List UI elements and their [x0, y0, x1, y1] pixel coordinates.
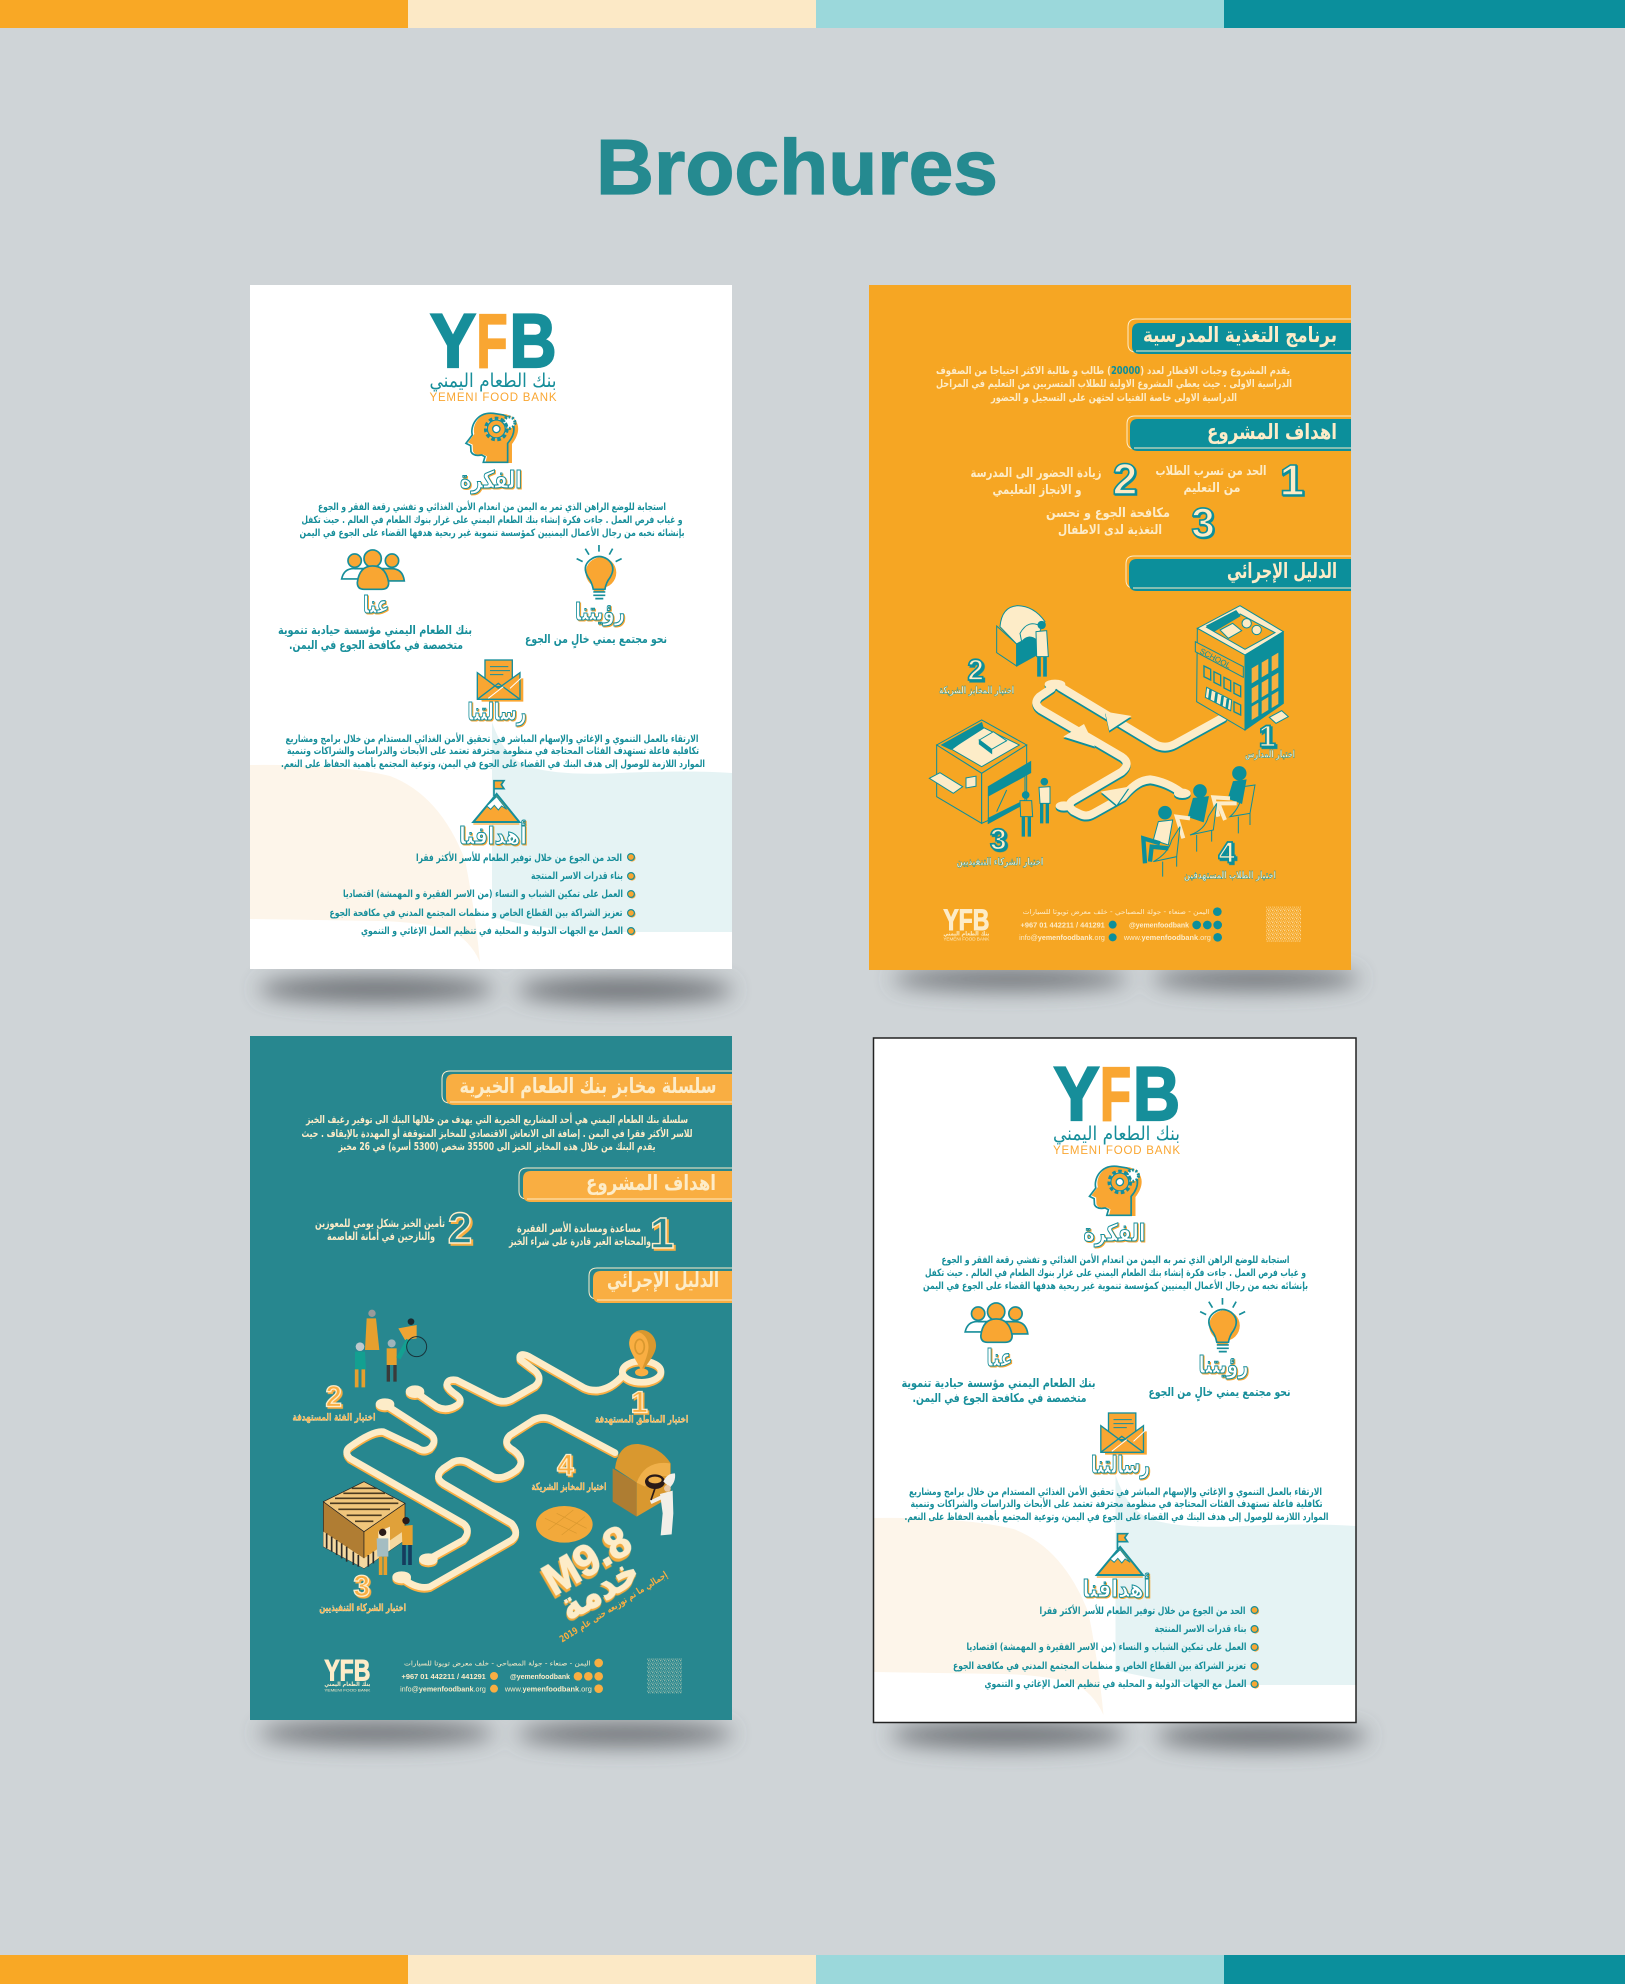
step 4 label [531, 1449, 606, 1493]
text block: programme description: الدراسية الاولى . حيث يعطي المشروع الاولية للطلاب المتسربين من التعليم في المراحل [936, 378, 1292, 390]
illustration: bakery oven with person [997, 606, 1048, 677]
footer: logo: YFB [943, 904, 989, 937]
logo [430, 299, 557, 404]
text block: chain description: يقدم البنك من خلال هذه المخابز الخبز الى 35500 شخص (5300 أسرة) في 26 مخبز [338, 1139, 656, 1153]
footer: logo: YEMENI FOOD BANK [943, 937, 989, 942]
text block: idea [300, 500, 684, 539]
step 2 label [939, 654, 1014, 696]
total meals word: خدمة [551, 1548, 648, 1630]
footer: QR code [647, 1658, 682, 1693]
text block: about us: بنك الطعام اليمني مؤسسة حيادية تنموية [902, 1376, 1096, 1391]
bread loaf [536, 1506, 593, 1543]
logo: Y [1054, 1052, 1100, 1137]
goal 2: تأمين الخبز بشكل يومي للمعوزين [315, 1216, 445, 1230]
heading: about us: عنا [363, 591, 389, 619]
banner: bakery chain [442, 1071, 732, 1105]
brochure border [874, 1038, 1356, 1722]
total meals caption: إجمالي ما تم توزيعه حتى عام 2019 [558, 1570, 670, 1645]
logo: بنك الطعام اليمني [1053, 1123, 1180, 1145]
step 3 label [957, 823, 1043, 868]
title: Brochures [596, 123, 998, 211]
banner: school feeding programme: برنامج التغذية المدرسية [1143, 323, 1337, 347]
map pin [629, 1330, 656, 1376]
list: goals [330, 851, 636, 937]
list: goals: العمل على تمكين الشباب و النساء (من الاسر الفقيرة و المهمشة) اقتصاديا [966, 1642, 1246, 1653]
step 1 label [595, 1385, 688, 1426]
panel: brochure 1 white company profile [250, 285, 732, 969]
step 3 label [319, 1570, 406, 1614]
heading: our vision: رؤيتنا [1198, 1351, 1248, 1379]
step 1 label: اختيار المدارس [1245, 749, 1295, 760]
heading: our message: رسالتنا [468, 698, 526, 726]
footer: contact details: www.yemenfoodbank.org [504, 1684, 592, 1693]
panel: brochure 3 teal bakery chain [250, 1036, 732, 1720]
decorative cream wave [250, 765, 480, 962]
step 3 label: اختيار الشركاء التنفيذيين [957, 857, 1043, 868]
footer: contact details: +967 01 442211 / 441291 [401, 1672, 487, 1681]
text block: chain description [302, 1112, 693, 1153]
text block: idea: بإنشائه نخبه من رجال الأعمال اليمنيين كمؤسسة تنموية غير ربحية هدفها القضاء على الجوع في اليمن [923, 1279, 1308, 1292]
footer: contact details: info@yemenfoodbank.org [1019, 933, 1105, 942]
banner: project goals [519, 1168, 732, 1202]
list: goals: الحد من الجوع من خلال توفير الطعام للأسر الأكثر فقرا [416, 851, 622, 864]
goal 1: 1 [1280, 456, 1304, 505]
text block: idea: و غياب فرص العمل . جاءت فكرة إنشاء بنك الطعام اليمني على غرار بنوك الطعام في العالم . حيث تكفل [925, 1268, 1306, 1279]
text block: about us: متخصصة في مكافحة الجوع في اليمن. [289, 638, 463, 653]
footer: logo: بنك الطعام اليمني [324, 1682, 370, 1688]
step 2 label: 2 [326, 1381, 342, 1414]
goal 2: زيادة الحضور الى المدرسة [970, 466, 1102, 481]
goal 2: 2 [448, 1204, 472, 1253]
banner: bakery chain: سلسلة مخابز بنك الطعام الخيرية [460, 1074, 716, 1098]
icon: head with gears [466, 413, 518, 463]
heading: our goals: أهدافنا [459, 820, 527, 850]
logo [1053, 1052, 1180, 1157]
goal 1 [508, 1209, 674, 1258]
heading: the idea: الفكرة [460, 466, 522, 494]
heading: about us: عنا [986, 1344, 1012, 1372]
logo: B [1133, 1052, 1180, 1137]
footer: logo: بنك الطعام اليمني [943, 931, 989, 937]
text block: idea [923, 1253, 1308, 1292]
text block: vision: نحو مجتمع يمني خالٍ من الجوع [525, 632, 667, 649]
step 2 label: اختيار الفئة المستهدفة [292, 1413, 375, 1424]
winding flow path [347, 1354, 661, 1587]
goal 1: 1 [650, 1209, 674, 1258]
goal 1: الحد من تسرب الطلاب [1156, 464, 1266, 479]
banner: project goals: اهداف المشروع [586, 1171, 716, 1195]
text block: about us [902, 1376, 1096, 1406]
flow path [1036, 681, 1223, 816]
text block: idea: استجابة للوضع الراهن الذي تمر به اليمن من انعدام الأمن الغذائي و تفشي رقعة الفقر و الجوع [942, 1253, 1290, 1266]
banner: procedural guide: الدليل الإجرائي [607, 1268, 719, 1292]
logo: Y [430, 299, 476, 384]
text block: about us: متخصصة في مكافحة الجوع في اليمن. [912, 1391, 1086, 1406]
sign: school: SCHOOL [1198, 647, 1233, 671]
logo: F [476, 299, 508, 384]
footer: contact details: @yemenfoodbank [1129, 921, 1190, 930]
panel: brochure 2 orange school feeding [869, 285, 1351, 970]
panel: brochure 4 bordered company profile [874, 1038, 1356, 1722]
text block: chain description: للاسر الأكثر فقرا في اليمن . إضافة الى الانعاش الاقتصادي للمخابز المتوقفة أو المهددة بالإيقاف . حيث [302, 1126, 693, 1140]
banner: procedural guide [589, 1268, 732, 1303]
banner: procedural guide [1126, 556, 1351, 591]
list: goals: العمل على تمكين الشباب و النساء (من الاسر الفقيرة و المهمشة) اقتصاديا [343, 889, 623, 900]
goal 1: مساعدة ومساندة الأسر الفقيرة [517, 1221, 641, 1235]
icon: mountain flag [473, 781, 519, 824]
step 2 label [292, 1381, 375, 1424]
text block: message: الارتقاء بالعمل التنموي و الإغاثي والإسهام المباشر في تحقيق الأمن الغذائي المستدام من خلال برامج ومشاريع [286, 732, 698, 745]
icon: envelope [1101, 1413, 1147, 1455]
text block: message: الموارد اللازمة للوصول إلى هدف البنك في القضاء على الجوع في اليمن، وتوعية المجتمع بأهمية الحفاظ على النعم. [904, 1510, 1328, 1523]
footer: QR code [1266, 907, 1301, 942]
icon: head with gears [1089, 1166, 1142, 1216]
goal 1: من التعليم [1184, 481, 1240, 496]
icon: group of people [965, 1303, 1028, 1342]
footer: contact details: www.yemenfoodbank.org [1123, 933, 1211, 942]
list: goals: بناء قدرات الاسر المنتجة [531, 871, 623, 882]
goal 2: والنازحين في أمانة العاصمة [327, 1229, 435, 1243]
step 3 label: 3 [353, 1570, 370, 1603]
footer: contact details: اليمن - صنعاء - جولة المصباحي - خلف معرض تويوتا للسيارات [1023, 908, 1209, 916]
goal 1: والمحتاجة الغير قادرة على شراء الخبز [508, 1235, 651, 1248]
step 1 label: 1 [1259, 720, 1276, 754]
banner: project goals: اهداف المشروع [1207, 420, 1337, 444]
text block: programme description: يقدم المشروع وجبات الافطار لعدد (20000) طالب و طالبة الاكثر احتياجا من الصفوف [936, 365, 1290, 377]
footer: contact details [400, 1659, 603, 1693]
icon: envelope [477, 660, 523, 702]
step 3 label: اختيار الشركاء التنفيذيين [319, 1603, 406, 1614]
list: goals: الحد من الجوع من خلال توفير الطعام للأسر الأكثر فقرا [1040, 1604, 1246, 1617]
goal 2: 2 [1113, 455, 1137, 504]
step 2 label: اختيار المخابز الشريكة [939, 685, 1014, 696]
bread oven with baker [613, 1444, 675, 1535]
footer: contact details: +967 01 442211 / 441291 [1020, 921, 1106, 930]
icon: group of people [342, 550, 404, 589]
step 3 label: 3 [990, 823, 1007, 856]
step 1 label [1245, 720, 1295, 760]
footer: logo: YEMENI FOOD BANK [324, 1688, 371, 1693]
footer: contact details: @yemenfoodbank [510, 1672, 571, 1681]
text block: about us [278, 623, 472, 653]
decorative teal wave [1116, 1475, 1356, 1685]
goal 3: مكافحة الجوع و تحسن [1046, 506, 1170, 521]
illustration: bakery chain flow [292, 1310, 688, 1693]
text block: chain description: سلسلة بنك الطعام اليمني هي أحد المشاريع الخيرية التي يهدف من خلالها البنك الى توفير رغيف الخبز [305, 1112, 688, 1126]
arrows on flow path [1063, 712, 1132, 805]
banner: school feeding programme [1128, 319, 1351, 354]
banner: procedural guide: الدليل الإجرائي [1227, 559, 1337, 583]
icon: light bulb [1200, 1298, 1245, 1352]
text block: about us: بنك الطعام اليمني مؤسسة حيادية تنموية [278, 623, 472, 638]
list: goals: تعزيز الشراكة بين القطاع الخاص و منظمات المجتمع المدني في مكافحة الجوع [330, 908, 623, 919]
goal 3 [1046, 499, 1215, 546]
illustration: store building with people [929, 720, 1050, 837]
text block: idea: و غياب فرص العمل . جاءت فكرة إنشاء بنك الطعام اليمني على غرار بنوك الطعام في العالم . حيث تكفل [302, 515, 682, 526]
footer: contact details: اليمن - صنعاء - جولة المصباحي - خلف معرض تويوتا للسيارات [404, 1659, 591, 1667]
text block: idea: استجابة للوضع الراهن الذي تمر به اليمن من انعدام الأمن الغذائي و تفشي رقعة الفقر و الجوع [318, 500, 666, 513]
heading: the idea: الفكرة [1084, 1219, 1146, 1247]
goal 2: و الانجاز التعليمي [992, 483, 1082, 498]
step 4 label: اختيار الطلاب المستهدفين [1184, 870, 1276, 881]
footer: contact details [1019, 907, 1222, 942]
list: goals [953, 1604, 1259, 1690]
text block: message [904, 1485, 1328, 1523]
logo: بنك الطعام اليمني [430, 370, 556, 392]
text block: programme description [936, 365, 1292, 404]
step 1 label: اختيار المناطق المستهدفة [595, 1415, 688, 1426]
decorative teal wave [492, 722, 732, 932]
icon: mountain flag [1097, 1534, 1143, 1577]
step 4 label: اختيار المخابز الشريكة [531, 1482, 606, 1493]
illustration: school feeding flow [929, 606, 1301, 942]
text block: message: تكافلية فاعلة تستهدف الفئات المحتاجة في منظومة محترفة تعتمد على الأبحاث والدراسات والشراكات وتنمية [287, 744, 699, 757]
goal 2 [315, 1204, 472, 1253]
logo: B [510, 299, 556, 384]
text block: vision: نحو مجتمع يمني خالٍ من الجوع [1148, 1385, 1290, 1402]
text block: programme description: الدراسية الاولى خاصة الفتيات لحثهن على التسجيل و الحضور [990, 392, 1237, 404]
logo: F [1100, 1052, 1131, 1137]
decorative cream wave [874, 1518, 1104, 1715]
logo: YEMENI FOOD BANK [1053, 1145, 1180, 1157]
step 4 label: 4 [1218, 836, 1235, 869]
goal 2 [970, 455, 1137, 504]
text block: idea: بإنشائه نخبه من رجال الأعمال اليمنيين كمؤسسة تنموية غير ربحية هدفها القضاء على الجوع في اليمن [300, 526, 684, 539]
text block: message: تكافلية فاعلة تستهدف الفئات المحتاجة في منظومة محترفة تعتمد على الأبحاث والدراسات والشراكات وتنمية [910, 1497, 1323, 1510]
goal 3: 3 [1191, 499, 1215, 546]
step 4 label: 4 [557, 1449, 574, 1482]
bottom colour bar [0, 1955, 1625, 1984]
footer: logo: YFB [324, 1655, 370, 1688]
step 4 label [1184, 836, 1276, 881]
icon: light bulb [577, 545, 622, 599]
drop shadows under brochures [258, 968, 1368, 1749]
text block: message: الموارد اللازمة للوصول إلى هدف البنك في القضاء على الجوع في اليمن، وتوعية المجتمع بأهمية الحفاظ على النعم. [281, 757, 705, 770]
list: goals: العمل مع الجهات الدولية و المحلية في تنظيم العمل الإغاثي و التنموي [361, 926, 623, 937]
list: goals: بناء قدرات الاسر المنتجة [1154, 1624, 1246, 1635]
tent stall with people [323, 1482, 413, 1575]
list: goals: العمل مع الجهات الدولية و المحلية في تنظيم العمل الإغاثي و التنموي [984, 1679, 1246, 1690]
building: school [1195, 606, 1288, 730]
goal 3: التغذية لدى الاطفال [1058, 523, 1162, 538]
heading: our goals: أهدافنا [1082, 1573, 1150, 1603]
list: goals: تعزيز الشراكة بين القطاع الخاص و منظمات المجتمع المدني في مكافحة الجوع [953, 1661, 1246, 1672]
heading: our message: رسالتنا [1091, 1451, 1150, 1479]
people group [355, 1310, 427, 1387]
footer: contact details: info@yemenfoodbank.org [400, 1684, 486, 1693]
step 1 label: 1 [631, 1385, 648, 1419]
text block: message [281, 732, 705, 770]
goal 1 [1156, 456, 1304, 505]
total meals figure: M9.8 [535, 1517, 640, 1605]
text block: message: الارتقاء بالعمل التنموي و الإغاثي والإسهام المباشر في تحقيق الأمن الغذائي المستدام من خلال برامج ومشاريع [909, 1485, 1322, 1498]
illustration: seated students [1143, 767, 1255, 877]
top colour bar [0, 0, 1625, 28]
logo: YEMENI FOOD BANK [430, 392, 557, 404]
banner: project goals [1127, 416, 1351, 451]
heading: our vision: رؤيتنا [575, 598, 625, 626]
step 2 label: 2 [968, 654, 984, 687]
